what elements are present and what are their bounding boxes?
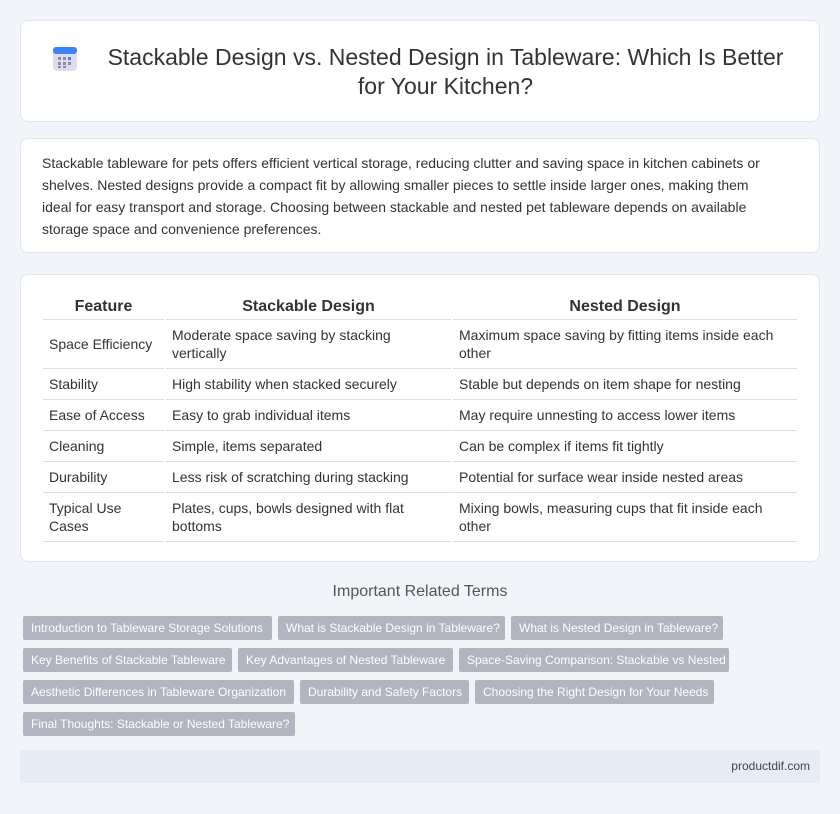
related terms tags: What is Stackable Design in Tableware? <box>286 621 500 635</box>
title: Stackable Design vs. Nested Design in Tableware: Which Is Better <box>108 44 783 70</box>
comparison table: Ease of Access <box>49 407 145 423</box>
comparison table: Stable but depends on item shape for nesting <box>459 376 741 392</box>
comparison table card <box>20 274 820 562</box>
related terms heading: Important Related Terms <box>333 583 507 600</box>
comparison table: Easy to grab individual items <box>172 407 350 423</box>
comparison table: Mixing bowls, measuring cups that fit inside each other <box>459 500 762 534</box>
comparison table: Moderate space saving by stacking vertically <box>172 327 391 361</box>
description text: ideal for easy transport and storage. Choosing between stackable and nested pet tableware depends on available <box>42 199 746 215</box>
title <box>108 44 784 99</box>
related terms tags: Key Advantages of Nested Tableware <box>246 653 445 667</box>
comparison table <box>43 298 797 542</box>
comparison table: Durability <box>49 469 107 485</box>
description text: Stackable tableware for pets offers efficient vertical storage, reducing clutter and saving space in kitchen cabinets or <box>42 155 760 171</box>
comparison table: Plates, cups, bowls designed with flat bottoms <box>172 500 404 534</box>
title: for Your Kitchen? <box>358 73 533 99</box>
related terms tags: Aesthetic Differences in Tableware Organization <box>31 685 286 699</box>
comparison table: Stability <box>49 376 98 392</box>
related terms tags: Final Thoughts: Stackable or Nested Tableware? <box>31 717 289 731</box>
header card <box>20 20 820 122</box>
description card <box>20 138 820 253</box>
comparison table: High stability when stacked securely <box>172 376 397 392</box>
comparison table: Cleaning <box>49 438 104 454</box>
description text <box>42 155 760 237</box>
related terms tags: Choosing the Right Design for Your Needs <box>483 685 708 699</box>
comparison table: Less risk of scratching during stacking <box>172 469 409 485</box>
comparison table: Potential for surface wear inside nested areas <box>459 469 743 485</box>
comparison table: Simple, items separated <box>172 438 322 454</box>
footer brand: productdif.com <box>731 759 810 773</box>
comparison table: Space Efficiency <box>49 336 152 352</box>
description text: storage space and convenience preferences. <box>42 221 321 237</box>
comparison table: Nested Design <box>569 298 681 315</box>
related terms tags: Key Benefits of Stackable Tableware <box>31 653 226 667</box>
related terms tags: Introduction to Tableware Storage Solutions <box>31 621 263 635</box>
comparison table: Maximum space saving by fitting items inside each other <box>459 327 773 361</box>
icon: calendar <box>53 47 77 71</box>
comparison table: May require unnesting to access lower items <box>459 407 735 423</box>
comparison table: Stackable Design <box>242 298 375 315</box>
related terms tags: Space-Saving Comparison: Stackable vs Nested <box>467 653 726 667</box>
comparison table: Typical Use Cases <box>49 500 121 534</box>
comparison table: Can be complex if items fit tightly <box>459 438 664 454</box>
comparison table: Feature <box>75 298 132 315</box>
related terms tags: Durability and Safety Factors <box>308 685 462 699</box>
footer <box>20 750 820 783</box>
description text: shelves. Nested designs provide a compact fit by allowing smaller pieces to settle inside larger ones, making them <box>42 177 749 193</box>
related terms tags: What is Nested Design in Tableware? <box>519 621 718 635</box>
